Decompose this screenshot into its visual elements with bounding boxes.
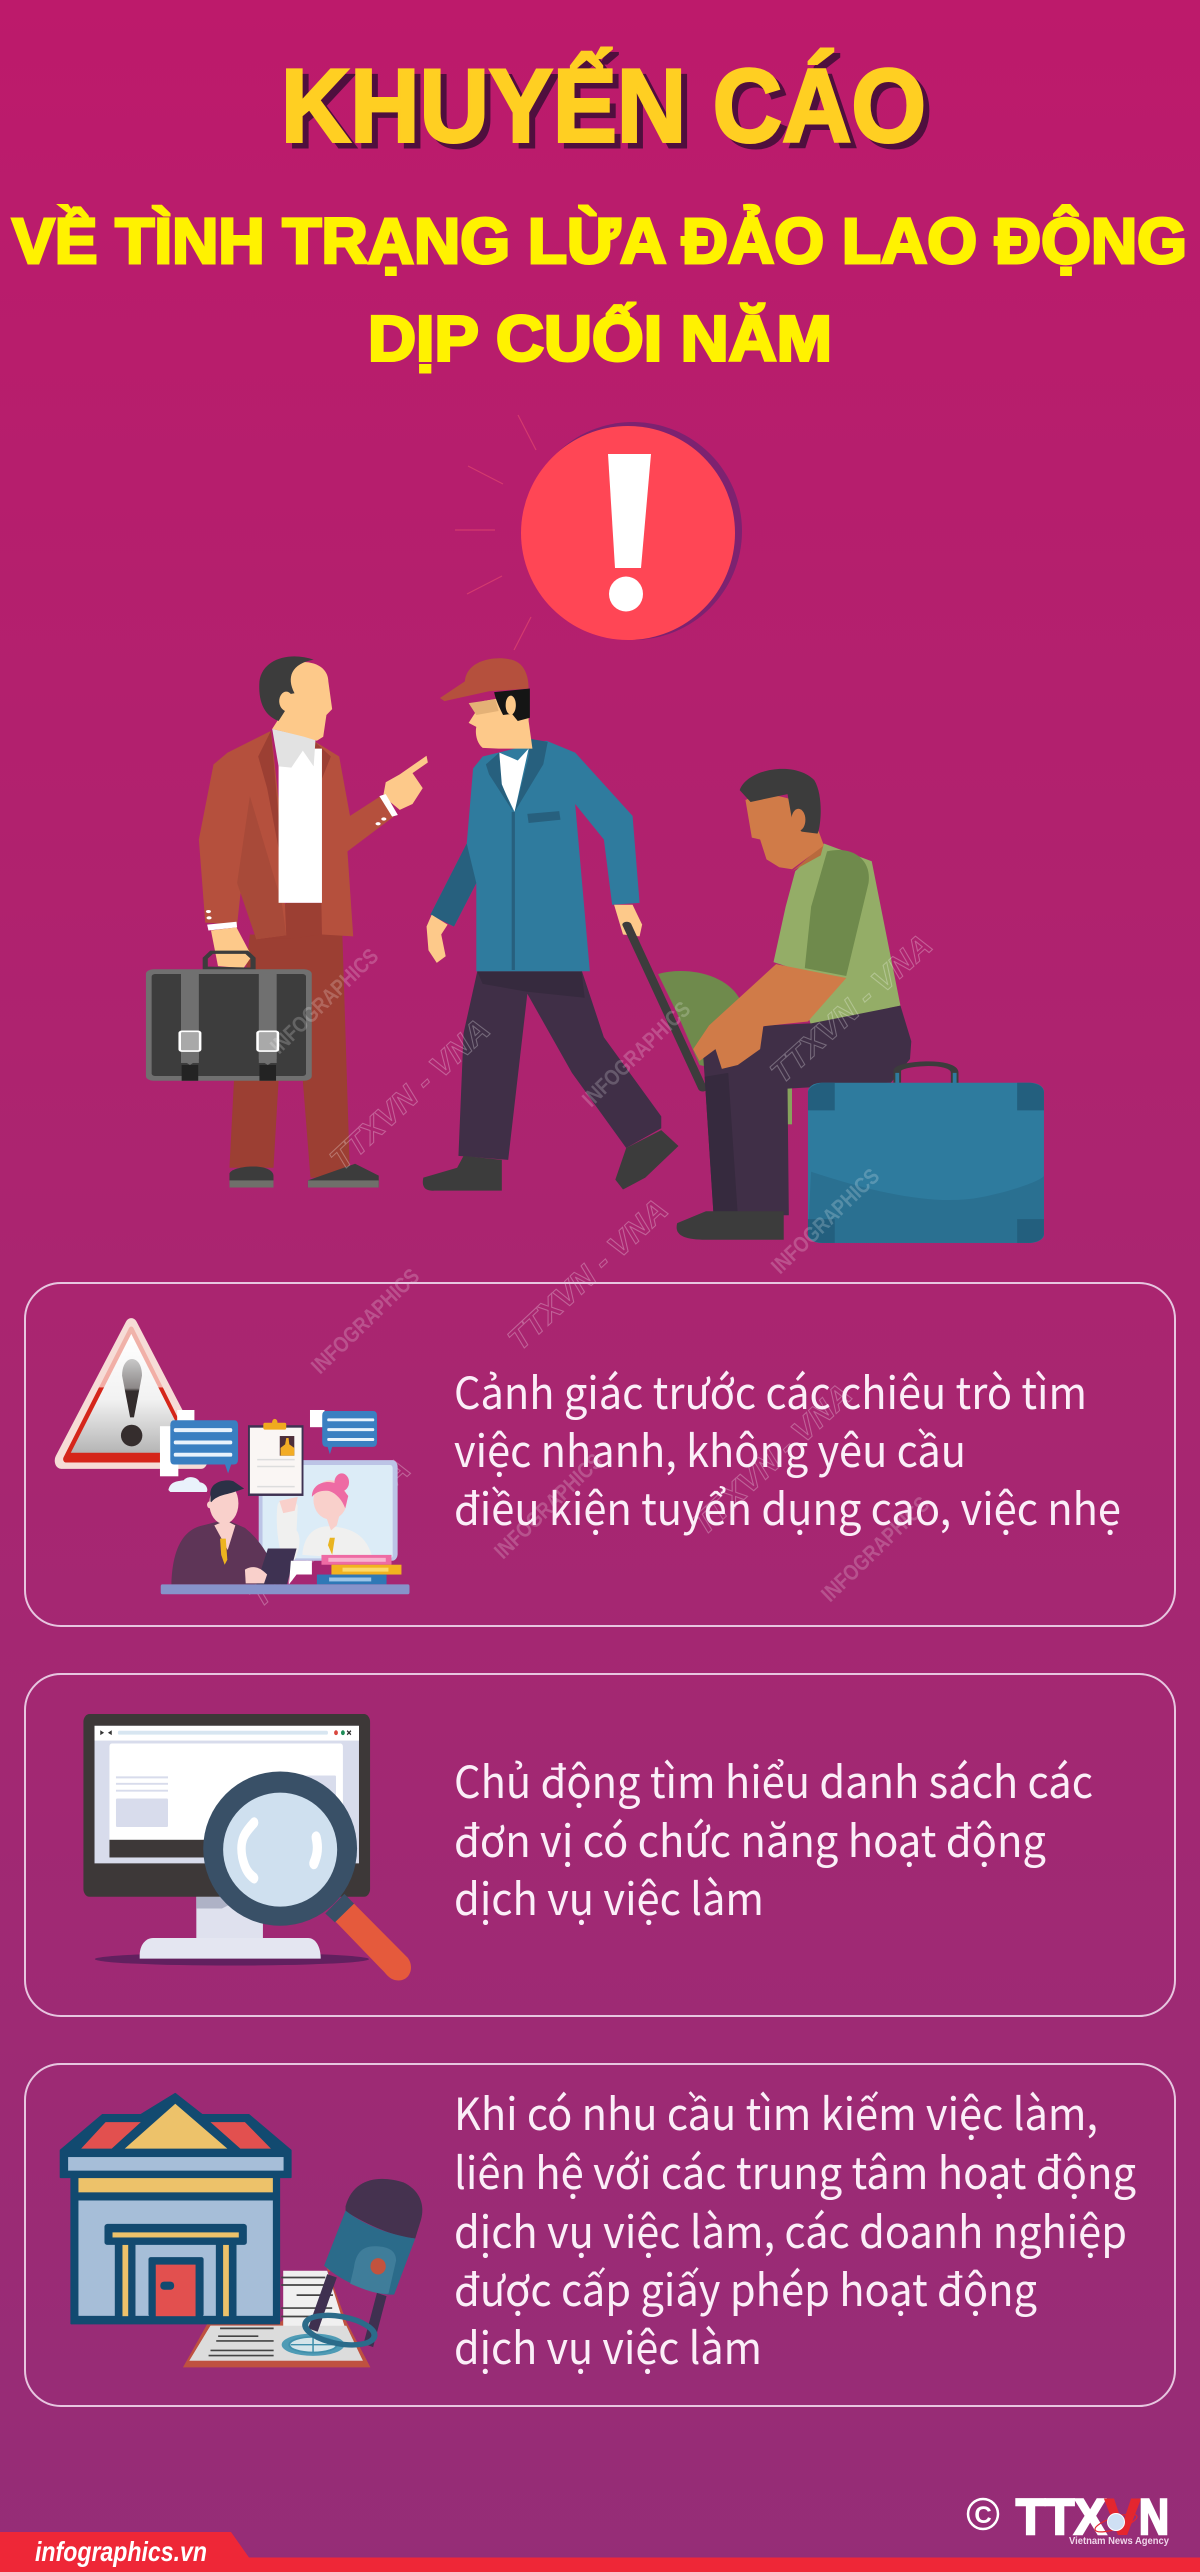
text: card 3: được cấp giấy phép hoạt động	[454, 2255, 1037, 2319]
watermarks: INFOGRAPHICS	[766, 1163, 884, 1279]
text: card 2: dịch vụ việc làm	[454, 1864, 764, 1928]
logo: TTXVN: Vietnam News Agency	[1069, 2536, 1169, 2547]
panel: card 2	[25, 1674, 1175, 2016]
watermarks: TTXVN - VNA	[323, 1012, 497, 1177]
watermarks: TTXVN - VNA	[501, 1192, 675, 1357]
suitcase	[808, 1083, 1044, 1243]
title	[12, 48, 1187, 374]
text: card 3: Khi có nhu cầu tìm kiếm việc làm,	[454, 2079, 1098, 2143]
text: card 1: việc nhanh, không yêu cầu	[454, 1416, 966, 1480]
text: card 1: Cảnh giác trước các chiêu trò tìm	[454, 1358, 1087, 1422]
title line 2: VỀ TÌNH TRẠNG LỪA ĐẢO LAO ĐỘNG	[12, 204, 1187, 277]
seated man with suitcase	[658, 769, 1044, 1243]
logo: TTXVN: V	[1105, 2489, 1141, 2545]
panel: card 1	[25, 1283, 1175, 1626]
text: card 2: đơn vị có chức năng hoạt động	[454, 1806, 1046, 1870]
watermarks: INFOGRAPHICS	[816, 1491, 934, 1607]
text: card 3: dịch vụ việc làm	[454, 2313, 762, 2377]
text: card 3: liên hệ với các trung tâm hoạt động	[454, 2138, 1136, 2202]
text: card 3	[454, 2079, 1136, 2377]
text: card 1: điều kiện tuyển dụng cao, việc nhẹ	[454, 1474, 1121, 1538]
man with cap and cane	[423, 658, 703, 1191]
title line 1: KHUYẾN CÁO	[281, 48, 926, 164]
logo: TTXVN: C	[974, 2502, 992, 2529]
logo: TTXVN: TTX	[1016, 2489, 1106, 2545]
panel: card 3	[25, 2064, 1175, 2406]
briefcase	[146, 969, 312, 1081]
watermarks: TTXVN - VNA	[763, 927, 939, 1090]
text: card 3: dịch vụ việc làm, các doanh nghiệp	[454, 2197, 1127, 2261]
text: card 1	[454, 1358, 1121, 1538]
watermarks	[241, 927, 939, 1614]
watermarks: INFOGRAPHICS	[306, 1263, 424, 1379]
stamp	[302, 2179, 422, 2350]
watermarks: INFOGRAPHICS	[577, 996, 695, 1112]
text: card 2	[454, 1747, 1093, 1928]
man with briefcase	[146, 656, 428, 1188]
icon: monitor and magnifier	[83, 1714, 411, 1980]
logo: TTXVN	[968, 2489, 1169, 2547]
title line 3: DỊP CUỐI NĂM	[368, 302, 832, 374]
footer site name: infographics.vn	[35, 2536, 207, 2567]
text: card 2: Chủ động tìm hiểu danh sách các	[454, 1747, 1093, 1811]
icon: building and stamp	[60, 2094, 422, 2367]
watermarks: TTXVN - VNA	[685, 1377, 859, 1542]
cane	[627, 925, 703, 1089]
illustration: three workers	[146, 656, 1044, 1243]
watermarks: TTXVN - VNA	[241, 1451, 417, 1614]
footer band	[0, 2532, 1200, 2572]
logo: TTXVN: N	[1139, 2489, 1169, 2545]
title line 1: KHUYẾN CÁO	[287, 54, 932, 170]
watermarks: INFOGRAPHICS	[489, 1448, 607, 1564]
icon: alert circle	[455, 415, 742, 650]
icon: warning sign and interview	[61, 1326, 409, 1594]
watermarks: INFOGRAPHICS	[265, 943, 383, 1059]
